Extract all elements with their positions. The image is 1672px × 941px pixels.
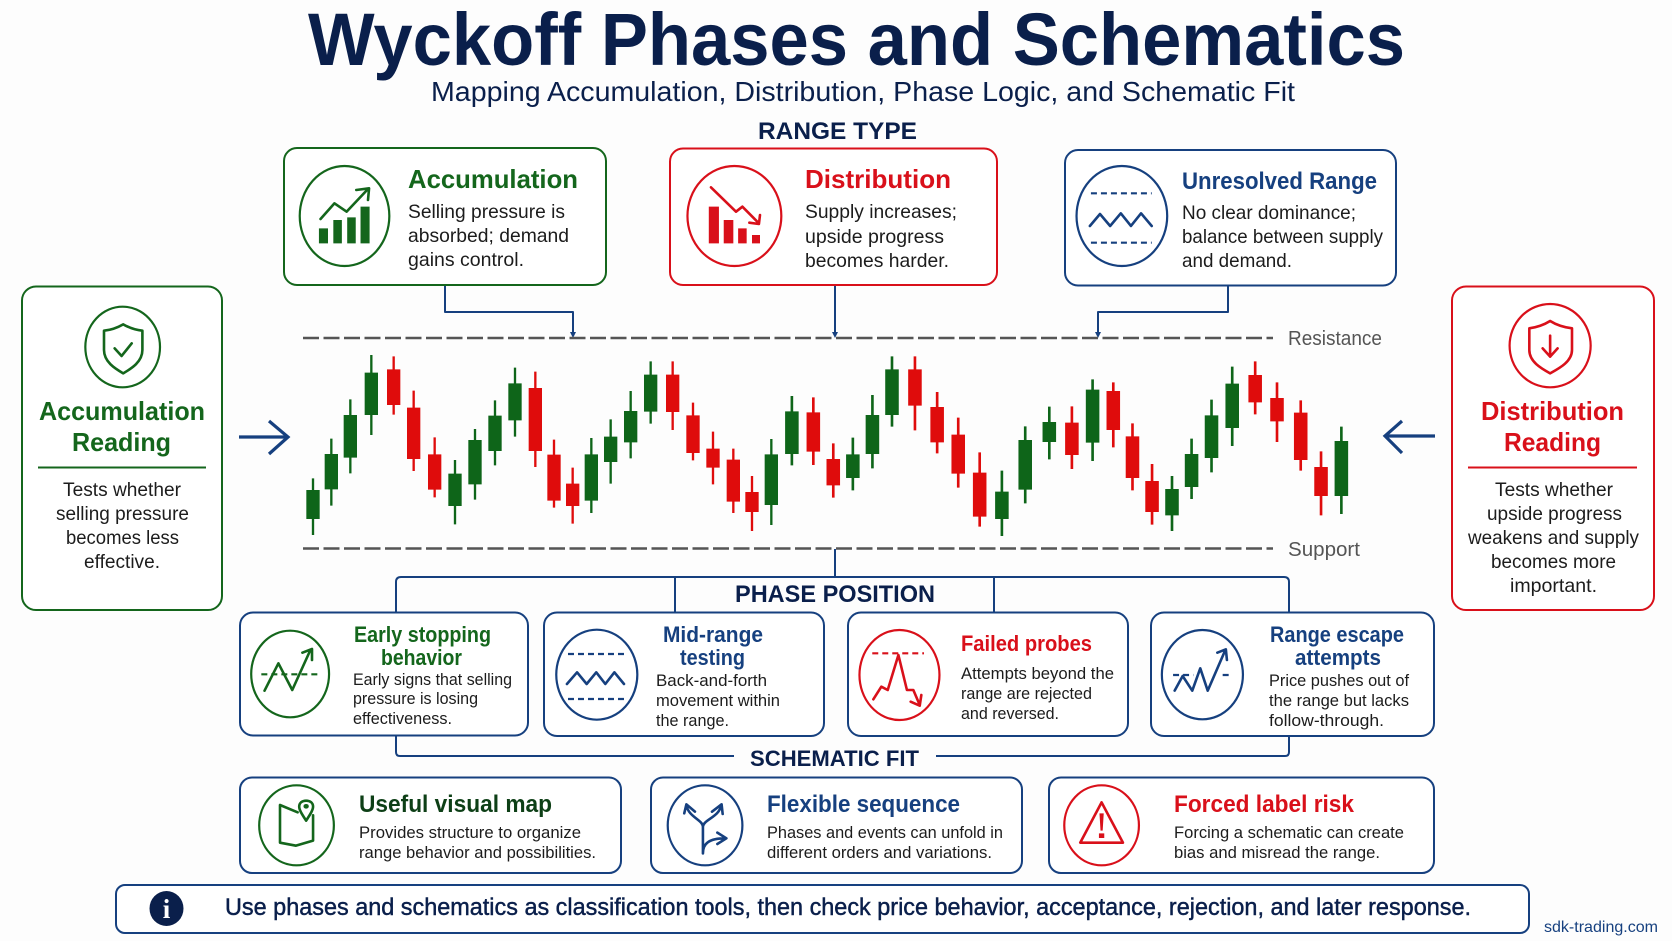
text: accumulation description <box>408 201 569 271</box>
subtitle: Mapping Accumulation, Distribution, Phase Logic, and Schematic Fit <box>431 76 1295 107</box>
text: accumulation reading description: Tests whether <box>63 479 181 501</box>
text: range escape description: follow-through. <box>1269 711 1384 730</box>
panel: useful visual map <box>240 778 621 873</box>
icon: shield with check <box>85 307 160 387</box>
arrow: left reading to chart <box>239 421 288 454</box>
panel: accumulation reading <box>22 286 222 610</box>
text: distribution description: Supply increases; <box>805 201 957 223</box>
text: note: Use phases and schematics as classification tools, then check price behavior, acceptance, rejection, and later response. <box>225 894 1471 921</box>
heading: distribution reading: Reading <box>1504 427 1601 457</box>
text: failed probes description: and reversed. <box>961 704 1059 723</box>
text: accumulation reading description <box>56 479 189 573</box>
text: forced label description: bias and misread the range. <box>1174 844 1380 862</box>
resistance line <box>303 337 1273 339</box>
text: distribution description: upside progress <box>805 226 944 248</box>
text: distribution reading description: upside progress <box>1487 503 1622 525</box>
text: failed probes description: range are rejected <box>961 684 1092 703</box>
heading: failed probes: Failed probes <box>961 631 1092 656</box>
text: accumulation description: Selling pressure is <box>408 201 565 223</box>
icon: info <box>150 891 184 926</box>
icon: falling bars <box>687 166 781 266</box>
text: mid-range description: Back-and-forth <box>656 671 767 690</box>
text: early stopping description: pressure is losing <box>353 689 478 708</box>
text: unresolved description <box>1182 202 1383 272</box>
heading: mid-range testing <box>663 622 763 670</box>
icon: rejected spike <box>859 630 939 720</box>
heading: accumulation reading: Accumulation <box>39 396 205 426</box>
text: unresolved description: balance between supply <box>1182 226 1383 248</box>
title: Wyckoff Phases and Schematics <box>308 0 1405 81</box>
panel: distribution card <box>670 148 997 285</box>
text: mid-range description <box>656 671 780 730</box>
panel: unresolved range card <box>1065 150 1396 286</box>
text: visual map description <box>359 824 596 862</box>
support line <box>303 547 1273 550</box>
icon: range zigzag <box>1077 166 1167 266</box>
panel: early stopping behavior <box>240 612 528 736</box>
heading: distribution: Distribution <box>805 164 951 194</box>
heading: useful visual map: Useful visual map <box>359 791 552 818</box>
icon: map pin <box>259 785 334 865</box>
text: forced label description: Forcing a schematic can create <box>1174 824 1404 842</box>
text: flexible sequence description: different orders and variations. <box>767 844 992 862</box>
heading: range escape attempts: Range escape <box>1270 622 1404 647</box>
text: unresolved description: No clear dominance; <box>1182 202 1356 224</box>
callout: bottom note <box>116 885 1529 933</box>
text: early stopping description: Early signs that selling <box>353 670 512 689</box>
connector: phase position to schematic fit <box>396 736 1289 756</box>
heading: mid-range testing: Mid-range <box>663 622 763 647</box>
panel: forced label risk <box>1049 778 1434 873</box>
text: early stopping description <box>353 670 512 728</box>
text: forced label description <box>1174 824 1404 862</box>
text: mid-range description: movement within <box>656 691 780 710</box>
heading: early stopping behavior <box>354 622 491 670</box>
heading: flexible sequence: Flexible sequence <box>767 791 960 818</box>
icon: recovery line <box>251 631 329 717</box>
panel: range escape attempts <box>1151 612 1434 736</box>
text: failed probes description <box>961 664 1114 723</box>
icon: warning triangle <box>1064 785 1139 865</box>
text: failed probes description: Attempts beyond the <box>961 664 1114 683</box>
icon: shield with down arrow <box>1510 304 1591 387</box>
arrow: right reading to chart <box>1385 421 1435 453</box>
text: early stopping description: effectiveness. <box>353 709 452 728</box>
text: accumulation description: gains control. <box>408 249 524 271</box>
text: flexible sequence description: Phases and events can unfold in <box>767 824 1003 842</box>
text: range escape description: Price pushes out of <box>1269 671 1409 690</box>
icon: info: i <box>163 894 171 924</box>
icon: branching arrows <box>668 785 742 865</box>
text: flexible sequence description <box>767 824 1003 862</box>
text: distribution reading description: weakens and supply <box>1467 527 1639 549</box>
text: range escape description <box>1269 671 1409 730</box>
heading: accumulation reading: Reading <box>72 427 171 457</box>
connectors: range cards to resistance <box>445 285 1228 338</box>
text: accumulation reading description: effective. <box>84 551 160 573</box>
text: distribution description: becomes harder. <box>805 250 949 272</box>
panel: distribution reading <box>1452 286 1654 610</box>
text: range escape description: the range but lacks <box>1269 691 1409 710</box>
text: distribution reading description <box>1467 479 1639 597</box>
heading: range type: RANGE TYPE <box>758 118 917 145</box>
text: accumulation description: absorbed; demand <box>408 225 569 247</box>
heading: range escape attempts: attempts <box>1295 645 1381 670</box>
icon: rising bars <box>300 166 389 266</box>
panel: flexible sequence <box>651 778 1022 873</box>
label: resistance: Resistance <box>1288 328 1382 350</box>
heading: mid-range testing: testing <box>680 645 745 670</box>
label: support: Support <box>1288 539 1360 561</box>
text: mid-range description: the range. <box>656 711 729 730</box>
heading: range escape attempts <box>1270 622 1404 670</box>
text: accumulation reading description: selling pressure <box>56 503 189 525</box>
heading: early stopping behavior: Early stopping <box>354 622 491 647</box>
panel: accumulation card <box>284 148 606 285</box>
heading: accumulation: Accumulation <box>408 164 578 194</box>
heading: forced label risk: Forced label risk <box>1174 791 1355 818</box>
text: distribution description <box>805 201 957 272</box>
text: accumulation reading description: becomes less <box>66 527 179 549</box>
heading: accumulation reading <box>39 396 205 457</box>
source credit: sdk-trading.com <box>1544 919 1658 936</box>
panel: failed probes <box>848 612 1128 736</box>
icon: range zigzag <box>556 630 637 720</box>
heading: distribution reading: Distribution <box>1481 396 1624 426</box>
heading: early stopping behavior: behavior <box>381 645 462 670</box>
text: visual map description: Provides structure to organize <box>359 824 581 842</box>
text: distribution reading description: becomes more <box>1491 551 1616 573</box>
text: distribution reading description: important. <box>1510 575 1597 597</box>
heading: unresolved range: Unresolved Range <box>1182 168 1377 195</box>
icon: breakout line <box>1162 630 1243 719</box>
heading: phase position: PHASE POSITION <box>735 581 935 608</box>
heading: schematic fit: SCHEMATIC FIT <box>750 746 919 771</box>
panel: mid-range testing <box>544 612 824 736</box>
text: visual map description: range behavior and possibilities. <box>359 844 596 862</box>
text: distribution reading description: Tests whether <box>1495 479 1613 501</box>
candlestick chart <box>313 355 1341 536</box>
connector: support to phase position <box>396 549 1289 612</box>
heading: distribution reading <box>1481 396 1624 457</box>
text: unresolved description: and demand. <box>1182 250 1292 272</box>
